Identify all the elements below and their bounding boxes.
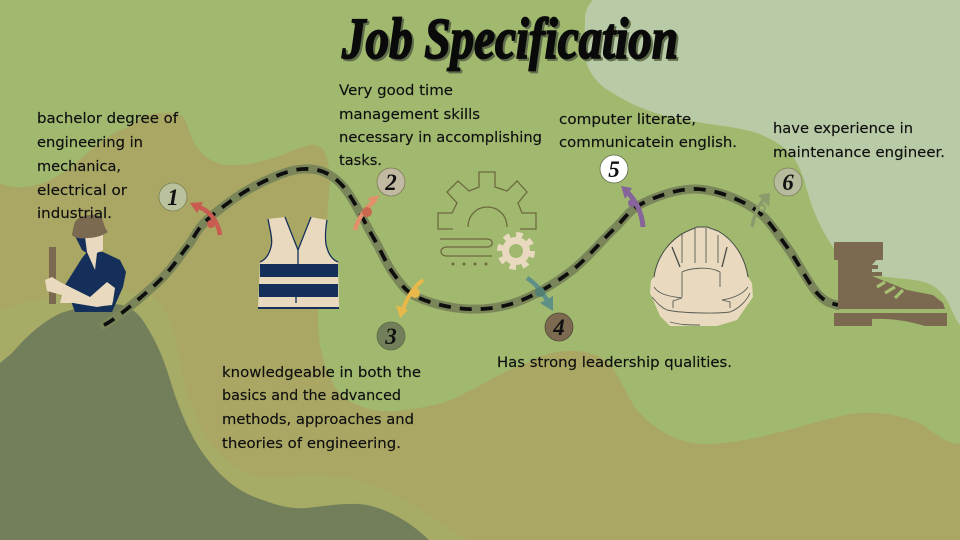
text: step 6: have experience in (773, 121, 913, 137)
icon: pin 3 (396, 280, 423, 318)
badge 1 (159, 183, 187, 211)
worker face (85, 234, 103, 270)
text: step 6: maintenance engineer. (773, 145, 945, 161)
text: step 2: necessary in accomplishing (339, 130, 542, 146)
icon: worker (45, 215, 126, 312)
text: step 2: management skills (339, 107, 480, 123)
text: step 5: computer literate, (559, 112, 696, 128)
icon: pin 6 (752, 193, 770, 227)
text: step 3 (222, 365, 421, 452)
text: step 1: electrical or (37, 183, 127, 199)
icon: safety vest (258, 217, 339, 309)
text: step 3: knowledgeable in both the (222, 365, 421, 381)
badge 4: 4 (552, 315, 565, 340)
icon: pin 5 (621, 186, 643, 227)
text: step 1: bachelor degree of (37, 111, 179, 127)
text: step 3: methods, approaches and (222, 412, 414, 428)
icon: hard hat (650, 227, 753, 326)
text: step 1: industrial. (37, 206, 112, 222)
gear dots (452, 262, 488, 266)
worker level tool (49, 247, 56, 304)
text: step 5 (559, 112, 737, 151)
icon: boot (834, 242, 947, 326)
icon: pin 1 (190, 202, 220, 235)
worker hard hat (72, 215, 108, 238)
text: step 1 (37, 111, 179, 222)
badge 6: 6 (782, 170, 794, 195)
text: step 4: Has strong leadership qualities. (497, 355, 732, 371)
background: dark hill (0, 304, 429, 540)
worker hair (75, 236, 90, 254)
icon: pin 2 (355, 195, 380, 230)
text: step 6 (773, 121, 945, 161)
title: Job Specification (341, 6, 678, 71)
worker arms (45, 277, 115, 307)
icon: gear and wind (438, 172, 536, 267)
text: step 3: basics and the advanced (222, 388, 401, 404)
background: light band around hill (0, 291, 468, 540)
icon: pin 4 (527, 278, 553, 311)
path: dashed trail (100, 169, 840, 327)
badge 4 (545, 313, 573, 341)
badge 2 (377, 168, 405, 196)
badge 5 (600, 155, 628, 183)
small solid gear (500, 235, 532, 267)
badge 2: 2 (384, 170, 397, 195)
badge 6 (774, 168, 802, 196)
text: step 1: engineering in (37, 135, 143, 151)
badge 3: 3 (384, 324, 397, 349)
text: step 2: Very good time (339, 83, 453, 99)
badge 3 (377, 322, 405, 350)
text: step 1: mechanica, (37, 159, 121, 175)
text: step 2: tasks. (339, 153, 382, 169)
text: step 3: theories of engineering. (222, 436, 401, 452)
text: step 5: communicatein english. (559, 135, 737, 151)
badge 5: 5 (608, 157, 620, 182)
worker shirt (65, 252, 126, 312)
background: olive region (0, 113, 960, 540)
text: step 2 (339, 83, 542, 169)
background: pale top-right region (584, 0, 960, 325)
badge 1: 1 (167, 185, 179, 210)
